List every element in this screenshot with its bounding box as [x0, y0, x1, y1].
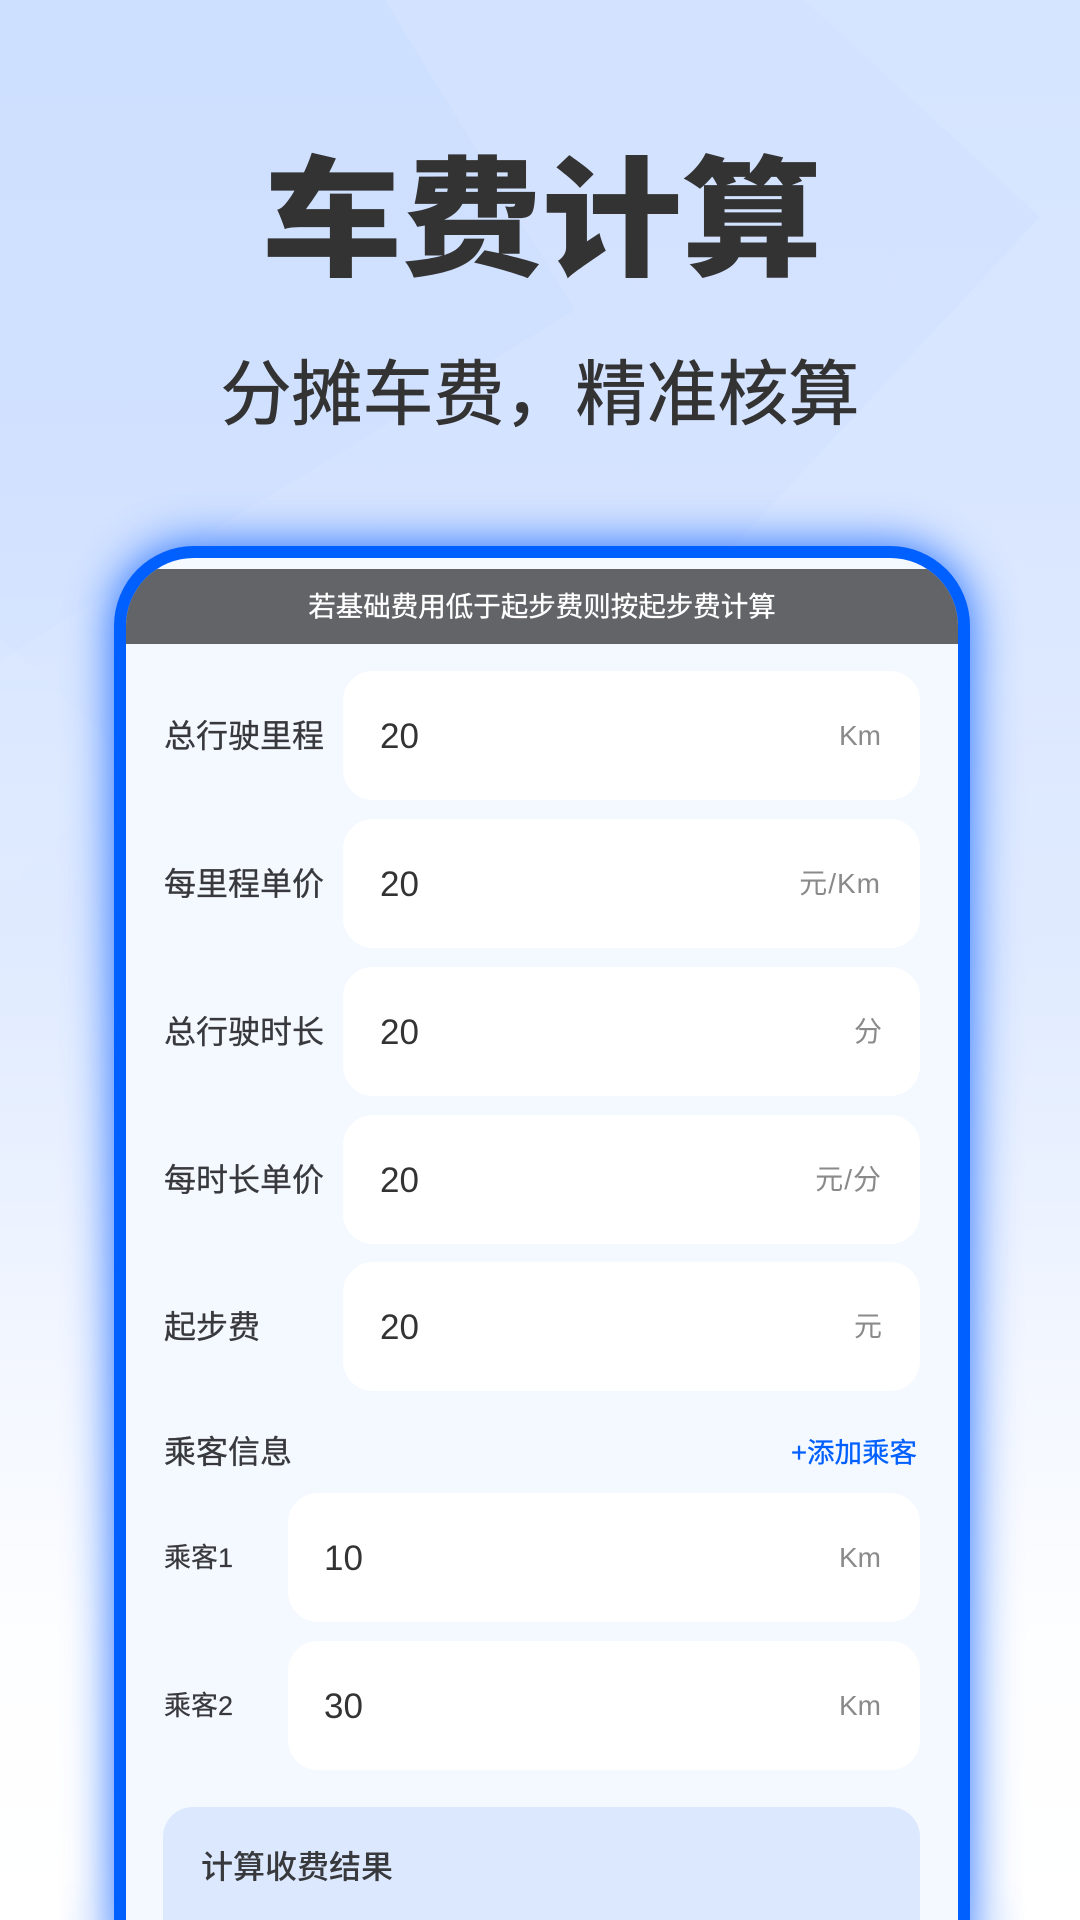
unit: 元: [854, 1311, 882, 1342]
passenger row 1: [164, 1493, 920, 1622]
glow: right bottom: [970, 1894, 1008, 1920]
value: 20: [380, 865, 419, 904]
background chevrons: [804, 0, 1080, 77]
form row: 起步费: [164, 1262, 920, 1391]
label: 总行驶里程: [164, 718, 324, 754]
label: 每时长单价: [164, 1162, 324, 1198]
unit: Km: [839, 1542, 881, 1573]
form row: 总行驶时长: [164, 967, 920, 1096]
label: 总行驶时长: [164, 1014, 324, 1050]
result heading: 计算收费结果: [201, 1849, 393, 1885]
notice bar: [126, 569, 958, 644]
value: 20: [380, 717, 419, 756]
unit: Km: [839, 720, 881, 751]
input: [343, 671, 920, 800]
passenger heading: 乘客信息: [164, 1434, 292, 1470]
unit: 元/分: [815, 1164, 882, 1195]
form row: 每里程单价: [164, 819, 920, 948]
phone frame: [114, 546, 970, 1920]
title: 车费计算: [262, 148, 822, 294]
unit: 分: [854, 1016, 882, 1047]
value: 20: [380, 1161, 419, 1200]
label: 乘客2: [164, 1691, 233, 1721]
unit: Km: [839, 1690, 881, 1721]
label: 乘客1: [164, 1543, 233, 1573]
input: [343, 819, 920, 948]
form row: 总行驶里程: [164, 671, 920, 800]
input: [343, 1262, 920, 1391]
label: 起步费: [164, 1309, 260, 1345]
label: 每里程单价: [164, 866, 324, 902]
glow: left bottom: [76, 1894, 114, 1920]
form row: 每时长单价: [164, 1115, 920, 1244]
passenger row 2: [164, 1641, 920, 1770]
input: [343, 1115, 920, 1244]
value: 20: [380, 1013, 419, 1052]
unit: 元/Km: [799, 868, 881, 899]
input: [343, 967, 920, 1096]
input: [288, 1493, 920, 1622]
value: 10: [324, 1539, 363, 1578]
result panel: [163, 1807, 920, 1920]
value: 20: [380, 1308, 419, 1347]
value: 30: [324, 1687, 363, 1726]
input: [288, 1641, 920, 1770]
subtitle: 分摊车费，精准核算: [220, 356, 860, 435]
add passenger link: +添加乘客: [791, 1437, 917, 1468]
notice text: 若基础费用低于起步费则按起步费计算: [308, 591, 776, 622]
